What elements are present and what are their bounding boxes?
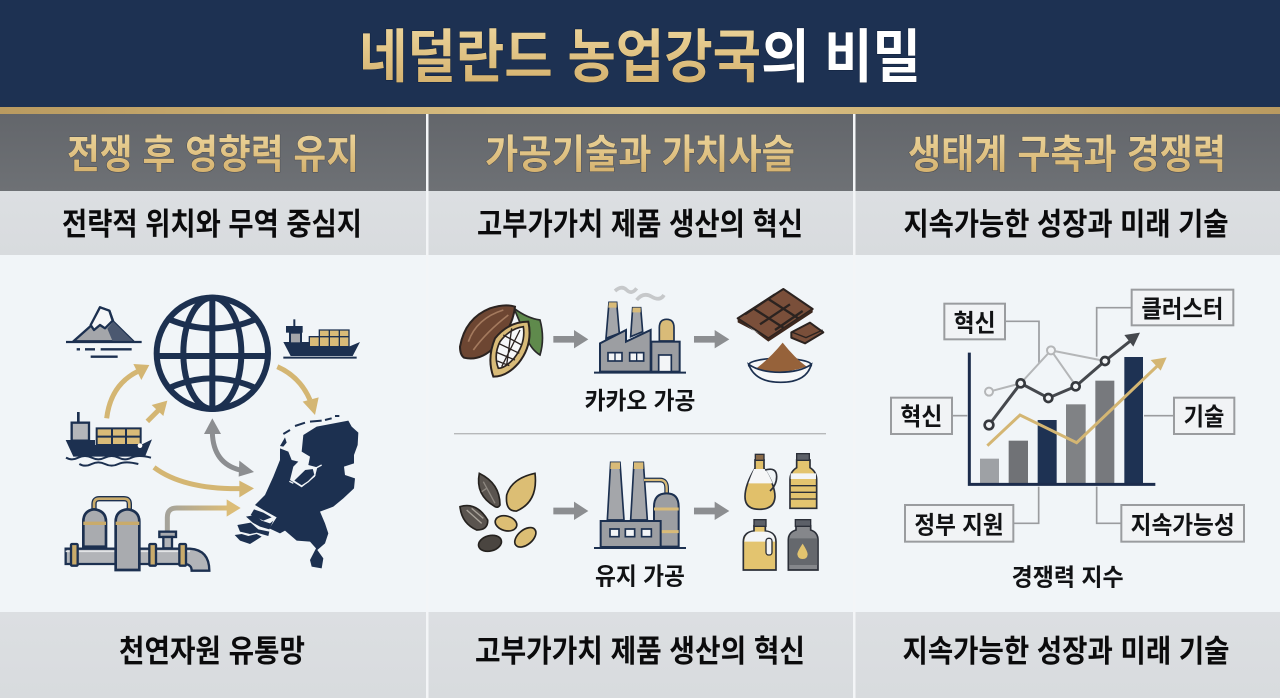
panel: footers bbox=[0, 612, 1280, 698]
icon: chocolate and powder bbox=[738, 289, 823, 382]
arrow: factory to oil products bbox=[694, 502, 729, 520]
subheading: column 2: 고부가가치 제품 생산의 혁신 bbox=[477, 207, 803, 242]
chart connectors bbox=[952, 308, 1174, 523]
subheading: column 3: 지속가능한 성장과 미래 기술 bbox=[904, 207, 1228, 242]
label: sustainability bbox=[1121, 505, 1244, 542]
icon: seeds bbox=[460, 473, 539, 554]
title: 네덜란드 농업강국의 비밀 bbox=[359, 25, 921, 90]
panel: competitiveness chart bbox=[891, 290, 1244, 591]
arrow: factory to chocolate bbox=[694, 330, 729, 348]
icon: cacao pods bbox=[460, 305, 542, 377]
label: technology: 기술 bbox=[1184, 404, 1224, 431]
arrow: globe to Netherlands bbox=[277, 367, 319, 415]
label: innovation top: 혁신 bbox=[954, 310, 996, 337]
text: oil processing: 유지 가공 bbox=[595, 563, 685, 590]
label: government support: 정부 지원 bbox=[914, 512, 1004, 539]
icon: container ship left bbox=[66, 412, 152, 466]
arrow: cacao to factory bbox=[553, 330, 588, 348]
arrow: pipeline to Netherlands bbox=[167, 499, 241, 531]
panel: column headings bbox=[0, 114, 1280, 191]
arrow: seeds to factory bbox=[553, 502, 588, 520]
label: government support bbox=[905, 505, 1013, 542]
panel: processing illustration bbox=[454, 288, 826, 590]
footer: column 1: 천연자원 유통망 bbox=[119, 634, 305, 669]
header band bbox=[0, 0, 1280, 114]
subheading: column 1: 전략적 위치와 무역 중심지 bbox=[62, 207, 362, 242]
heading: column 3: 생태계 구축과 경쟁력 bbox=[908, 133, 1226, 177]
label: cluster: 클러스터 bbox=[1141, 296, 1223, 323]
footer: column 2: 고부가가치 제품 생산의 혁신 bbox=[475, 634, 805, 669]
label: cluster bbox=[1132, 290, 1233, 325]
arrow: ship to globe upper bbox=[107, 364, 149, 418]
line: light grey series bbox=[985, 346, 1105, 396]
label: sustainability: 지속가능성 bbox=[1131, 512, 1235, 539]
icon: mountain bbox=[66, 307, 142, 357]
icon: pipeline and tanks bbox=[66, 499, 209, 571]
label: innovation top bbox=[944, 304, 1005, 339]
arrow: two-way globe and Netherlands bbox=[204, 418, 254, 477]
text: competitiveness index: 경쟁력 지수 bbox=[1012, 564, 1124, 591]
icon: container ship right bbox=[283, 319, 360, 358]
bar chart bbox=[969, 353, 1155, 484]
arrow: ship to globe lower bbox=[147, 401, 167, 421]
panel: trade network illustration bbox=[66, 298, 360, 571]
arrow: ship to Netherlands bbox=[154, 467, 254, 497]
line: dark series with arrow bbox=[985, 333, 1140, 429]
label: innovation left: 혁신 bbox=[900, 404, 942, 431]
label: technology bbox=[1174, 398, 1234, 434]
icon: oil bottles bbox=[743, 454, 818, 570]
footer: column 3: 지속가능한 성장과 미래 기술 bbox=[902, 634, 1230, 669]
map: Netherlands bbox=[235, 416, 358, 568]
line: gold trend arrow bbox=[987, 357, 1167, 446]
heading: column 1: 전쟁 후 영향력 유지 bbox=[67, 133, 359, 177]
icon: cacao factory bbox=[594, 288, 686, 373]
heading: column 2: 가공기술과 가치사슬 bbox=[485, 133, 795, 177]
icon: oil factory bbox=[594, 462, 686, 548]
panel: subheadings bbox=[0, 191, 1280, 255]
icon: globe bbox=[157, 298, 268, 409]
text: cacao processing: 카카오 가공 bbox=[585, 388, 695, 415]
label: innovation left bbox=[891, 398, 952, 434]
